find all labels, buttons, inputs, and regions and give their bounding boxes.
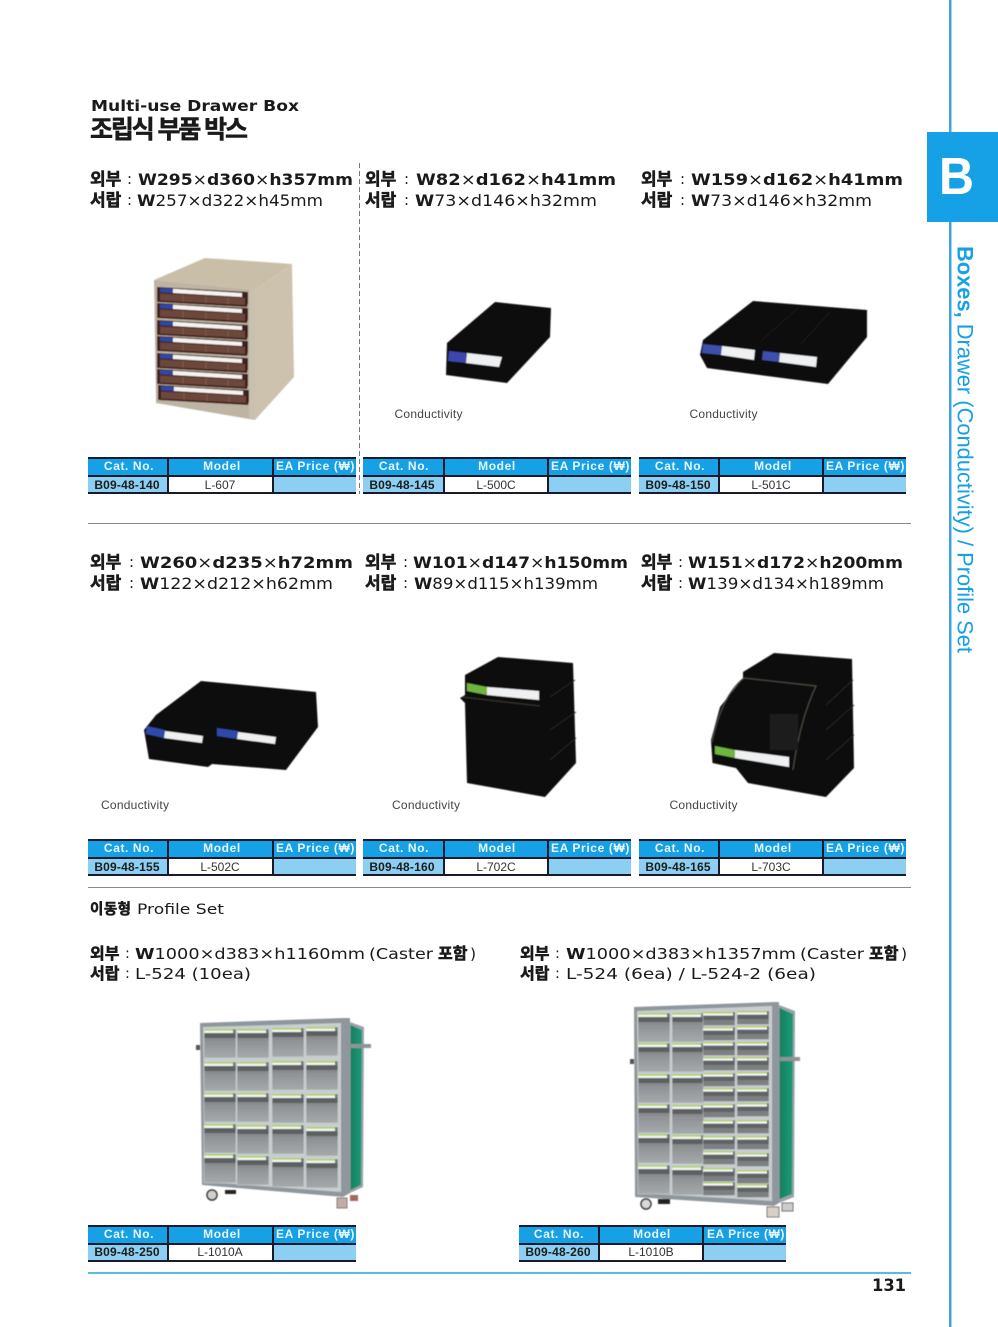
spec: L-607: W257×d322×h45mm: [137, 191, 323, 210]
spec: L-502C: W122×d212×h62mm: [140, 574, 333, 593]
table: B09-48-260: EA Price (₩): [707, 1227, 785, 1241]
spec: L-1010A: ): [470, 945, 476, 963]
spec: L-500C: W82 ×d162 ×h41mm: [416, 170, 616, 189]
table: B09-48-160: L-702C: [476, 860, 516, 874]
spec: L-702C: W101×d147×h150mm: [413, 553, 628, 572]
caption: Conductivity: [392, 798, 460, 812]
table: B09-48-140: [88, 457, 356, 494]
heading: Multi-use Drawer Box: [91, 97, 299, 115]
table: B09-48-165: L-703C: [751, 860, 791, 874]
spec: L-607: W295×d360×h357mm: [138, 170, 353, 189]
spec: L-500C: 외부: [365, 170, 396, 189]
spec: L-1010B: :: [555, 966, 560, 982]
table: B09-48-140: Cat. No.: [104, 459, 154, 473]
spec: L-1010A: :: [125, 946, 130, 962]
table: B09-48-165: B09-48-165: [645, 860, 711, 874]
spec: L-703C: :: [678, 574, 683, 592]
spec: L-1010A: :: [125, 966, 130, 982]
spec: L-703C: [641, 553, 903, 593]
spec: L-607: :: [127, 191, 132, 209]
spec: L-1010A: L-524 (10ea): [135, 965, 251, 983]
caption: Conductivity: [690, 407, 758, 421]
subheading: Profile Set: Profile Set: [137, 902, 225, 918]
spec: L-500C: W73×d146×h32mm: [415, 191, 597, 210]
table: B09-48-150: L-501C: [751, 478, 791, 492]
table: B09-48-260: [519, 1225, 786, 1262]
table: B09-48-160: B09-48-160: [369, 860, 435, 874]
caption: Conductivity: [101, 798, 169, 812]
spec: L-1010A: 서랍: [90, 965, 120, 983]
table: B09-48-165: Model: [754, 841, 792, 855]
table: B09-48-250: B09-48-250: [94, 1245, 160, 1259]
product photo: L-1010A profile cart: [196, 1018, 371, 1208]
divider: dashed: [358, 163, 360, 494]
spec: L-500C: :: [404, 170, 409, 188]
side category label: Boxes, Drawer (Conductivity) / Profile Set: [952, 246, 978, 653]
product photo: L-501C: [700, 301, 867, 384]
table: B09-48-260: L-1010B: [628, 1245, 674, 1259]
divider: [88, 522, 911, 524]
product photo: L-702C: [460, 657, 576, 797]
table: B09-48-155: B09-48-155: [94, 860, 160, 874]
table: B09-48-140: Model: [203, 459, 241, 473]
table: B09-48-150: Cat. No.: [655, 459, 705, 473]
table: B09-48-260: Cat. No.: [534, 1227, 584, 1241]
spec: L-501C: 외부: [641, 170, 672, 189]
table: B09-48-250: EA Price (₩): [276, 1227, 355, 1241]
spec: L-703C: W139×d134×h189mm: [688, 574, 884, 593]
table: B09-48-160: Cat. No.: [379, 841, 429, 855]
spec: L-501C: 서랍: [641, 191, 673, 210]
spec: L-703C: W151×d172×h200mm: [688, 553, 903, 572]
spec: L-607: :: [127, 170, 132, 188]
spec: L-607: 외부: [90, 170, 121, 189]
table: B09-48-145: Cat. No.: [379, 459, 429, 473]
footer rule: [88, 1272, 911, 1274]
spec: L-1010A: (Caster: [369, 945, 434, 963]
product photo: L-703C: [711, 653, 854, 797]
heading: 조립식 부품 박스: [90, 116, 248, 144]
table: B09-48-150: Model: [754, 459, 792, 473]
spec: L-702C: :: [403, 553, 408, 571]
spec: L-702C: W89×d115×h139mm: [414, 574, 598, 593]
table: B09-48-150: EA Price (₩): [826, 459, 905, 473]
spec: L-1010B: 외부: [520, 945, 550, 963]
subheading: Profile Set: [90, 901, 225, 918]
table: B09-48-250: L-1010A: [197, 1245, 243, 1259]
section tab B: B: [939, 148, 974, 206]
heading: [90, 97, 299, 144]
spec: L-1010A: [90, 945, 476, 983]
spec: L-501C: [641, 170, 903, 210]
product photo: L-607 cabinet: [154, 258, 294, 420]
table: B09-48-160: Model: [478, 841, 516, 855]
spec: L-500C: :: [404, 191, 409, 209]
product photo: L-502C: [144, 681, 318, 770]
spec: L-1010B: L-524 (6ea) / L-524-2 (6ea): [566, 965, 816, 983]
table: B09-48-145: [363, 457, 631, 494]
spec: L-607: 서랍: [90, 191, 122, 210]
table: B09-48-155: L-502C: [200, 860, 240, 874]
spec: L-702C: [365, 553, 628, 593]
spec: L-1010B: ): [901, 945, 907, 963]
spec: L-500C: [365, 170, 616, 210]
table: B09-48-165: EA Price (₩): [826, 841, 905, 855]
table: B09-48-140: EA Price (₩): [276, 459, 355, 473]
table: B09-48-140: L-607: [205, 478, 236, 492]
spec: L-703C: 외부: [641, 553, 672, 572]
table: B09-48-260: Model: [633, 1227, 671, 1241]
spec: L-501C: :: [680, 191, 685, 209]
table: B09-48-140: B09-48-140: [94, 478, 160, 492]
subheading: Profile Set: 이동형: [90, 901, 131, 918]
table: B09-48-250: Model: [203, 1227, 241, 1241]
table: B09-48-155: EA Price (₩): [276, 841, 355, 855]
table: B09-48-150: B09-48-150: [645, 478, 711, 492]
spec: L-703C: :: [678, 553, 683, 571]
spec: L-501C: W159 ×d162 ×h41mm: [691, 170, 903, 189]
table: B09-48-145: B09-48-145: [369, 478, 435, 492]
table: B09-48-250: [88, 1225, 356, 1262]
product photo: L-1010B profile cart: [630, 1002, 800, 1217]
spec: L-502C: 외부: [90, 553, 121, 572]
table: B09-48-250: Cat. No.: [104, 1227, 154, 1241]
table: B09-48-155: Cat. No.: [104, 841, 154, 855]
spec: L-502C: 서랍: [90, 574, 122, 593]
spec: L-607: [90, 170, 353, 210]
spec: L-502C: :: [129, 553, 134, 571]
spec: L-1010B: W1000×d383×h1357mm: [566, 945, 796, 963]
spec: L-1010B: 포함: [869, 945, 899, 963]
table: B09-48-155: [88, 839, 356, 876]
table: B09-48-155: Model: [203, 841, 241, 855]
spec: L-703C: 서랍: [641, 574, 673, 593]
spec: L-501C: :: [680, 170, 685, 188]
product photo: L-500C: [446, 302, 551, 383]
table: B09-48-145: L-500C: [476, 478, 516, 492]
table: B09-48-145: Model: [478, 459, 516, 473]
caption: Conductivity: [670, 798, 738, 812]
spec: L-501C: W73×d146×h32mm: [691, 191, 872, 210]
spec: L-500C: 서랍: [365, 191, 397, 210]
table: B09-48-145: EA Price (₩): [551, 459, 630, 473]
spec: L-1010A: 포함: [438, 945, 468, 963]
caption: Conductivity: [394, 407, 462, 421]
table: B09-48-260: B09-48-260: [525, 1245, 591, 1259]
spec: L-502C: [90, 553, 353, 593]
divider: [88, 886, 911, 888]
spec: L-1010A: 외부: [90, 945, 120, 963]
spec: L-502C: W260 ×d235 ×h72mm: [140, 553, 353, 572]
table: B09-48-150: [639, 457, 906, 494]
side rule: [949, 0, 952, 1327]
table: B09-48-160: EA Price (₩): [551, 841, 630, 855]
spec: L-702C: 서랍: [365, 574, 397, 593]
page number: 131: [872, 1276, 906, 1296]
table: B09-48-165: [639, 839, 906, 876]
spec: L-702C: 외부: [365, 553, 396, 572]
table: B09-48-160: [363, 839, 631, 876]
section tab B: [927, 132, 998, 222]
spec: L-1010B: (Caster: [800, 945, 865, 963]
table: B09-48-165: Cat. No.: [655, 841, 705, 855]
spec: L-1010B: :: [555, 946, 560, 962]
spec: L-702C: :: [403, 574, 408, 592]
spec: L-1010A: W1000×d383×h1160mm: [135, 945, 365, 963]
spec: L-1010B: 서랍: [520, 965, 550, 983]
spec: L-502C: :: [129, 574, 134, 592]
spec: L-1010B: [520, 945, 907, 983]
